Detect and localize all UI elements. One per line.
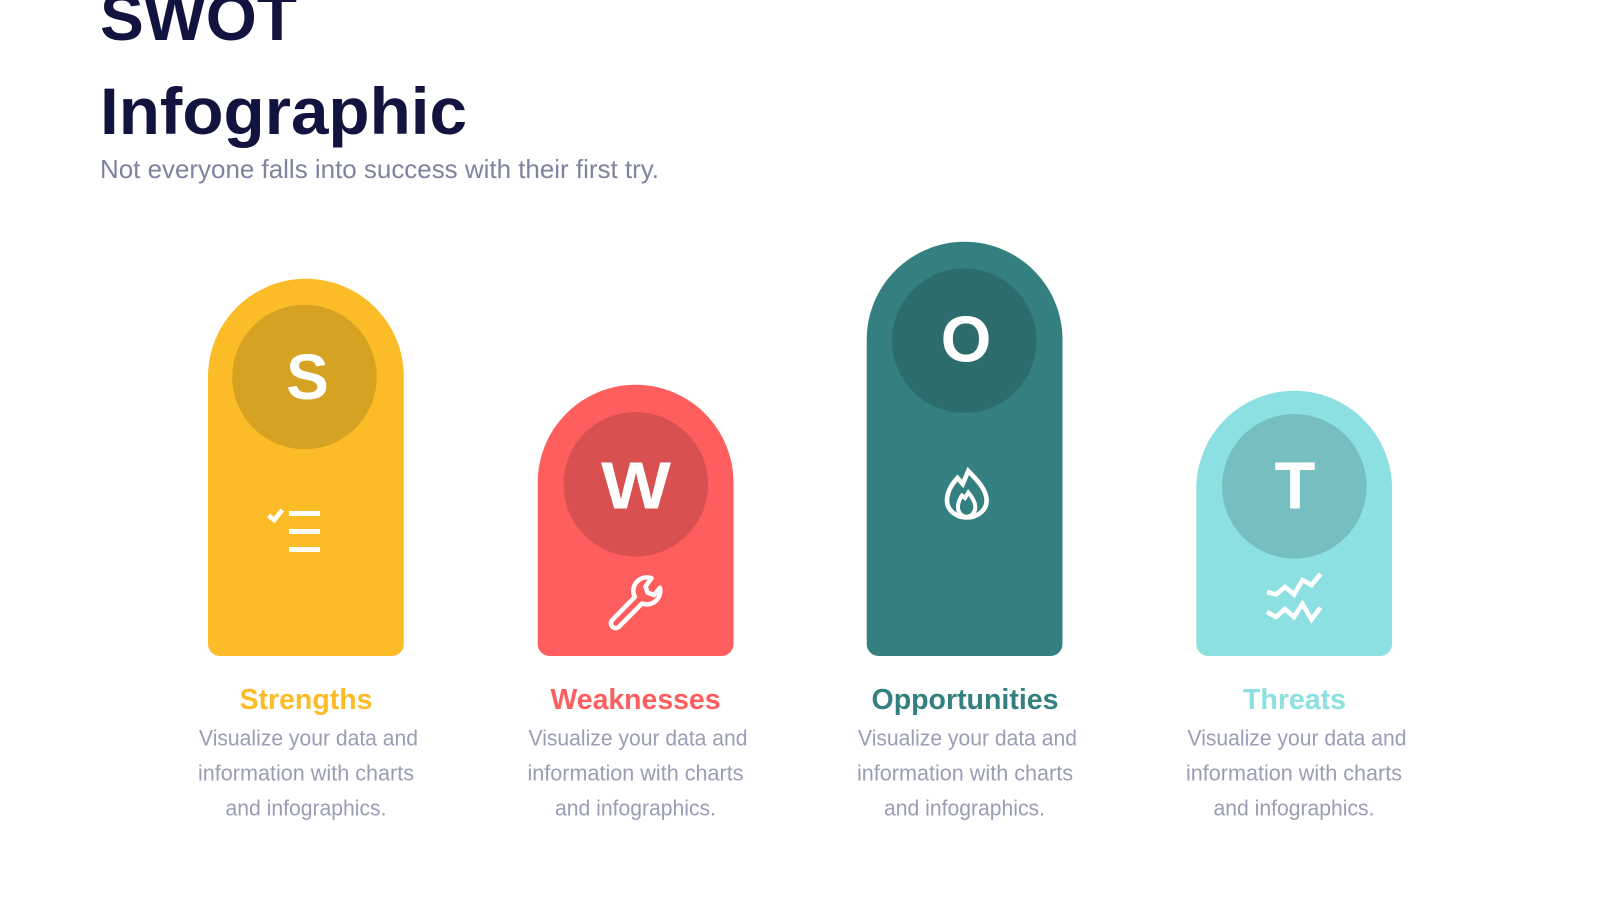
strengths description: information with charts bbox=[198, 760, 414, 786]
letter T: T bbox=[1275, 448, 1316, 524]
panel: weaknesses bbox=[528, 385, 748, 820]
strengths heading: Strengths bbox=[240, 684, 372, 716]
weaknesses card bbox=[538, 385, 734, 656]
threats letter circle bbox=[1222, 414, 1367, 559]
threats description bbox=[1186, 726, 1406, 820]
letter W: W bbox=[601, 448, 672, 524]
weaknesses description: Visualize your data and bbox=[528, 726, 748, 750]
strengths card bbox=[208, 279, 404, 656]
weaknesses description bbox=[528, 726, 748, 820]
panel: opportunities bbox=[857, 242, 1077, 820]
weaknesses description: information with charts bbox=[528, 760, 744, 786]
icon: checklist bbox=[268, 510, 320, 552]
weaknesses letter circle bbox=[563, 412, 708, 557]
panel: strengths bbox=[198, 279, 418, 820]
strengths description bbox=[198, 726, 418, 820]
icon: wrench bbox=[611, 577, 660, 628]
threats heading: Threats bbox=[1243, 684, 1346, 716]
letter O: O bbox=[941, 302, 991, 376]
weaknesses heading: Weaknesses bbox=[550, 684, 720, 716]
opportunities letter circle bbox=[892, 268, 1037, 413]
title: Infographic bbox=[100, 74, 467, 148]
icon: flame bbox=[947, 471, 987, 518]
threats card bbox=[1196, 391, 1392, 656]
strengths description: and infographics. bbox=[226, 796, 386, 820]
opportunities description: and infographics. bbox=[884, 796, 1045, 820]
opportunities description bbox=[857, 726, 1077, 820]
opportunities description: information with charts bbox=[857, 760, 1073, 786]
panel: threats bbox=[1186, 391, 1406, 820]
title bbox=[100, 0, 467, 148]
opportunities heading: Opportunities bbox=[872, 684, 1058, 716]
opportunities description: Visualize your data and bbox=[858, 726, 1077, 750]
threats description: information with charts bbox=[1186, 760, 1402, 786]
threats description: Visualize your data and bbox=[1188, 726, 1406, 750]
icon: zigzag trend lines bbox=[1267, 574, 1320, 620]
strengths description: Visualize your data and bbox=[199, 726, 418, 750]
letter S: S bbox=[286, 341, 329, 413]
weaknesses description: and infographics. bbox=[555, 796, 716, 820]
threats description: and infographics. bbox=[1214, 796, 1374, 820]
opportunities card bbox=[867, 242, 1062, 656]
subtitle: Not everyone falls into success with their first try. bbox=[100, 154, 659, 184]
strengths letter circle bbox=[232, 305, 377, 449]
